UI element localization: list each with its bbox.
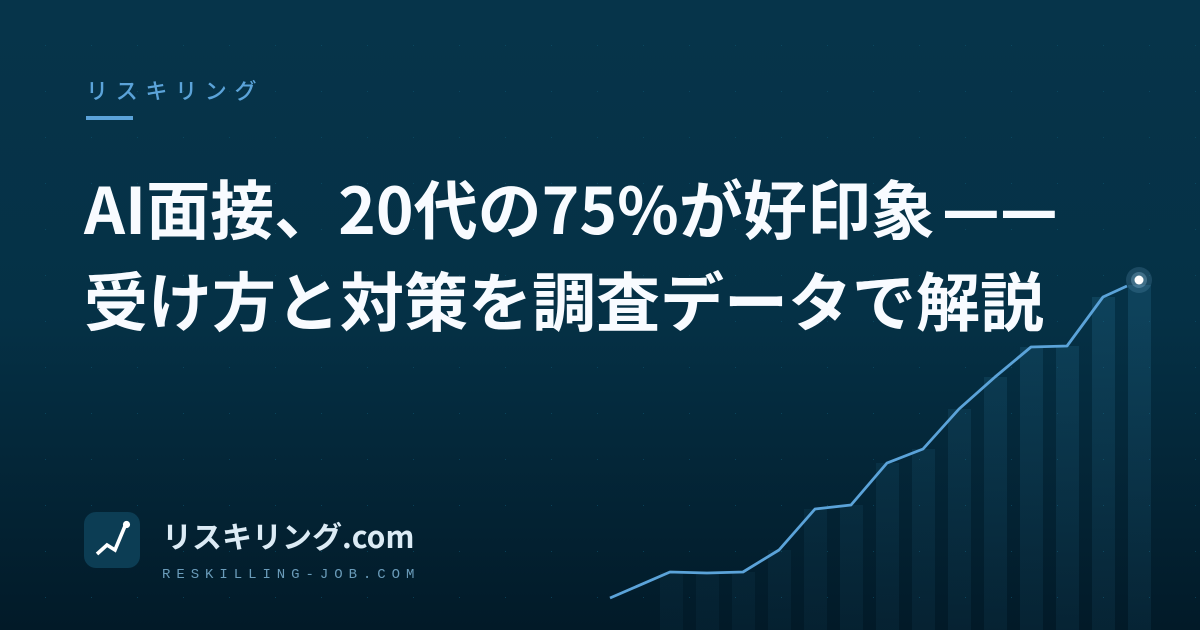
- icon: logo: [84, 512, 140, 568]
- bars: [660, 285, 1151, 630]
- brand name: リスキリング.com: [162, 513, 414, 557]
- end point marker: [1126, 267, 1152, 293]
- domain: RESKILLING-JOB.COM: [162, 567, 420, 583]
- accent rule: [86, 116, 133, 120]
- title: [84, 161, 1058, 345]
- title: AI面接、20代の75%が好印象——: [84, 161, 1058, 253]
- title: 受け方と対策を調査データで解説: [84, 253, 1044, 345]
- trend line: [610, 286, 1127, 598]
- category label: リスキリング: [86, 74, 264, 106]
